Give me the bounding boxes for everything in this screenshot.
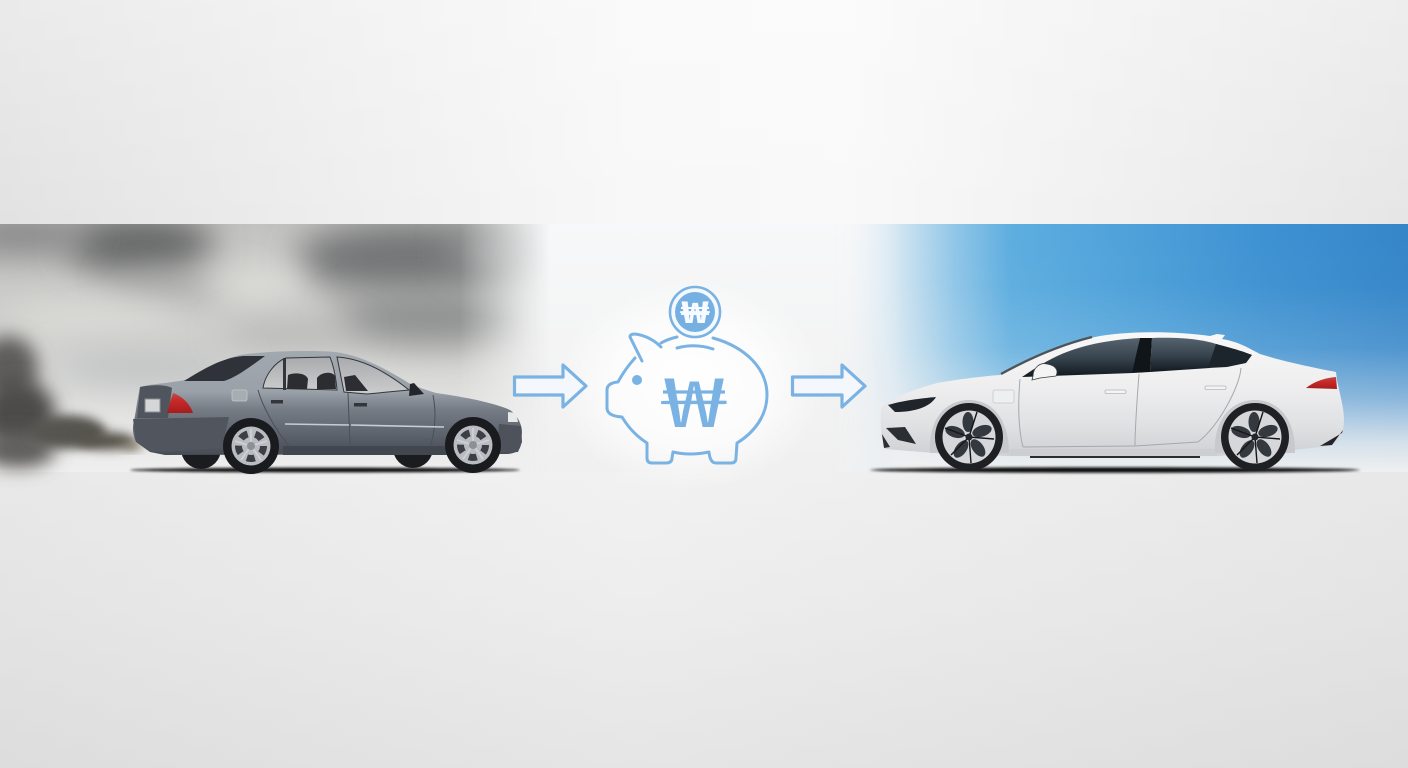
electric car rear diffuser [1320, 430, 1343, 446]
coin [670, 287, 720, 337]
old car tail light [167, 393, 193, 413]
old car mirror [409, 383, 424, 396]
piggy eye [632, 375, 642, 385]
old car licence plate [145, 399, 160, 412]
old car front window [337, 357, 409, 394]
electric car side windows [1022, 338, 1252, 377]
piggy coin slot [677, 346, 713, 349]
old car wheels [223, 417, 501, 474]
electric car windshield edge [1001, 337, 1092, 374]
old car rear window [184, 356, 265, 381]
electric car wheels [930, 400, 1295, 471]
old car far wheels [181, 428, 433, 469]
old car chrome strip [285, 424, 444, 427]
sky: polluted clouds [0, 224, 542, 435]
old car door handles [271, 400, 367, 406]
old car front bumper [497, 424, 522, 453]
old car rear side window [263, 357, 337, 390]
exhaust smoke [0, 336, 143, 468]
won symbol on piggy: ₩ [660, 348, 727, 447]
electric car ground shadow [870, 467, 1360, 473]
icon: piggy bank with won coin [607, 287, 767, 463]
old car seats [287, 373, 336, 389]
arrow: savings to electric car [792, 365, 865, 407]
old car sill [283, 446, 448, 455]
old car body [133, 351, 522, 455]
won symbol on piggy [660, 348, 727, 447]
old car door lines [258, 390, 435, 447]
electric car [870, 332, 1360, 473]
old car fuel door [232, 390, 247, 401]
electric car charge port [993, 390, 1014, 403]
electric car door handles [1105, 386, 1226, 394]
arrow: old car to savings [514, 365, 586, 407]
electric car sill [1010, 449, 1217, 456]
sky: clean blue [830, 224, 1408, 472]
old car steering and dash [344, 375, 368, 391]
old gasoline car [130, 351, 522, 474]
old car headlight [508, 412, 518, 422]
electric car front vent [882, 427, 916, 448]
old car lower bumper band [133, 417, 229, 452]
piggy bank outline [607, 334, 767, 463]
savings glow [555, 280, 825, 490]
electric car body [881, 332, 1344, 456]
old car ground shadow [130, 468, 520, 472]
coin: ₩ [679, 288, 711, 332]
old car trunk rear face [137, 385, 172, 418]
electric car mirror [1032, 364, 1057, 380]
electric car door seams [1019, 368, 1241, 447]
electric car tail light [1306, 377, 1337, 389]
old car pillar [283, 358, 286, 390]
electric car headlight [888, 397, 936, 412]
